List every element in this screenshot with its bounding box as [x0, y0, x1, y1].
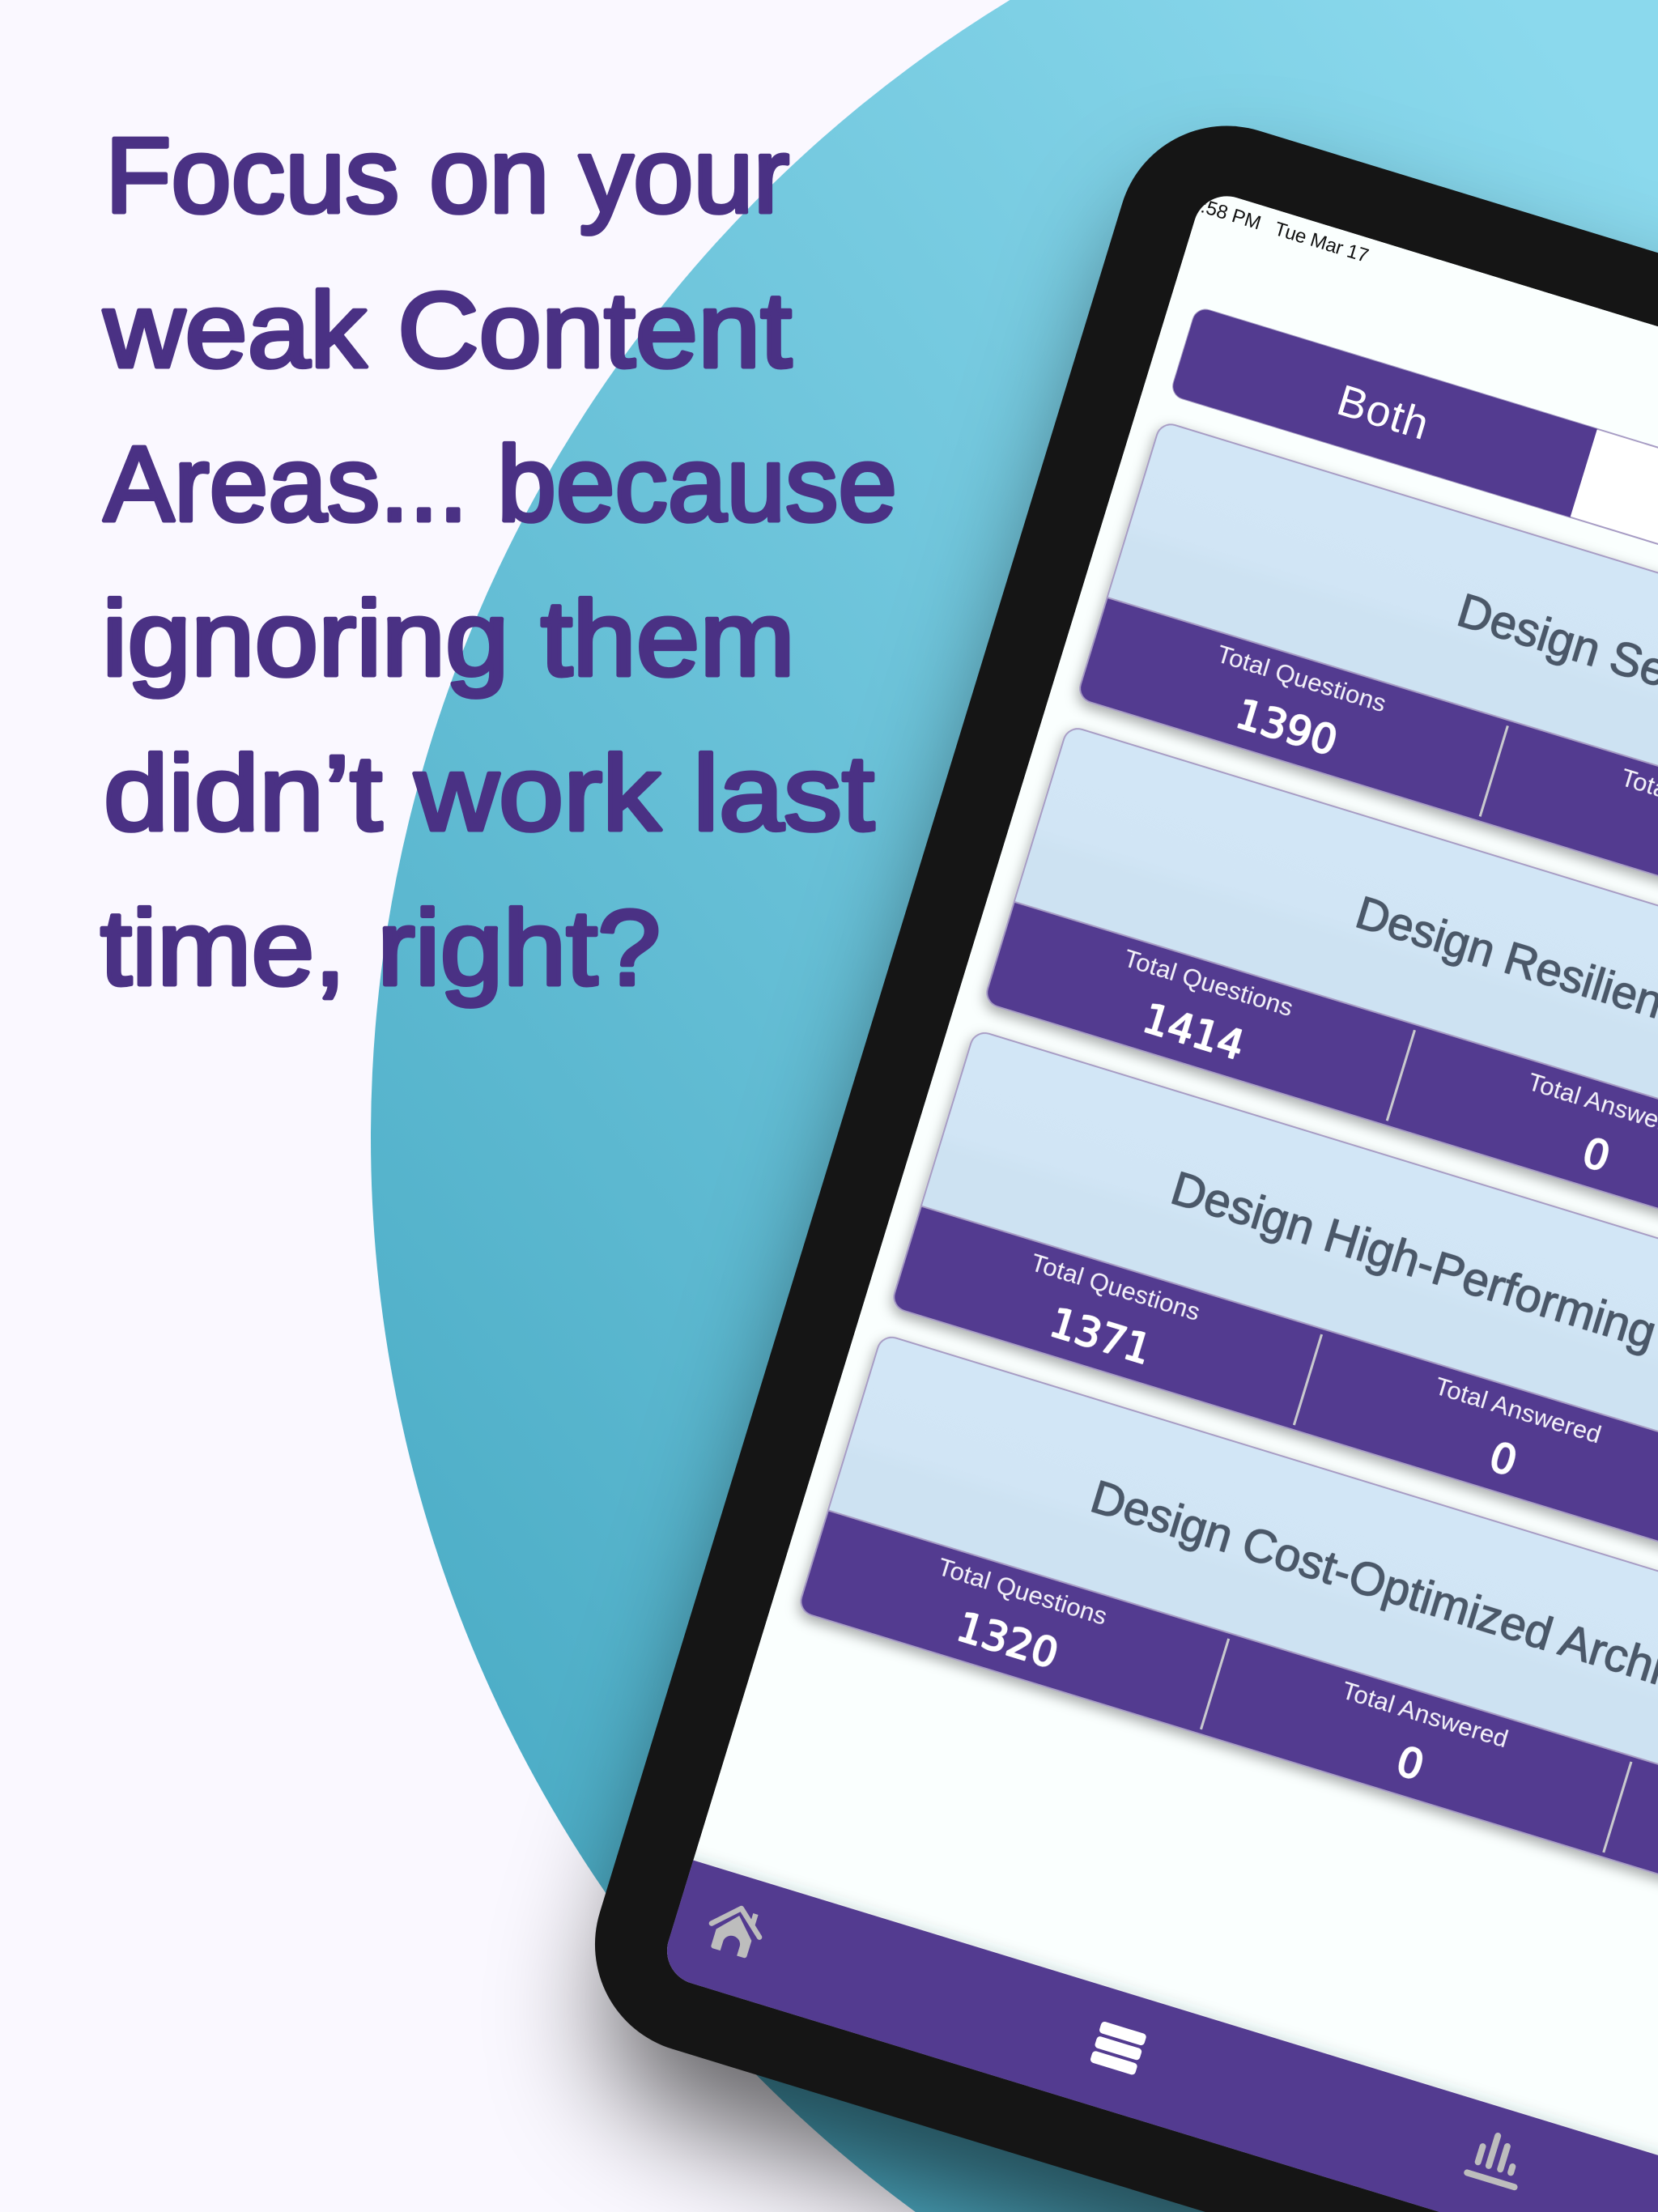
card: Design Resilient Architectures: 1414: [1137, 994, 1250, 1070]
device shadow: [578, 171, 1658, 2212]
screen: [629, 181, 1658, 2212]
headline: ignoring them: [102, 579, 795, 698]
headline: [100, 116, 897, 1007]
card: Design Resilient Architectures: Total Questions: [1120, 943, 1297, 1022]
card: Design Cost-Optimized Architectures: 1320: [951, 1603, 1064, 1678]
card: Design Cost-Optimized Architectures: [797, 1334, 1658, 2004]
teal circle: [371, 0, 1658, 2212]
segment label: Both: [1332, 376, 1435, 449]
card: Design High-Performing Architectures: [891, 1030, 1658, 1699]
card: Design Resilient Architectures: [984, 725, 1658, 1396]
card: Design Cost-Optimized Architectures: Total Answered: [1338, 1676, 1511, 1753]
segmented control: [1172, 309, 1658, 545]
status bar: [1201, 201, 1370, 261]
card: Design Cost-Optimized Architectures: Total Questions: [934, 1552, 1111, 1631]
status bar: :58 PM: [1198, 195, 1264, 234]
headline: didn’t work last: [104, 734, 874, 853]
card: Design Secure Architectures: [1077, 421, 1658, 1091]
icon: home: [704, 1901, 766, 1960]
headline: Focus on your: [105, 116, 789, 235]
card: Design High-Performing Architectures: Total Answered: [1431, 1372, 1605, 1449]
headline: Areas... because: [104, 424, 897, 543]
headline: time, right?: [100, 888, 661, 1007]
tab bar: [629, 1853, 1658, 2212]
status bar: Tue Mar 17: [1272, 218, 1371, 267]
card: Design Resilient Architectures: 0: [1577, 1129, 1615, 1181]
screen background: [659, 188, 1658, 2212]
icon: bar chart: [1463, 2126, 1532, 2191]
icon: list menu: [1090, 2021, 1147, 2076]
card: Design High-Performing Architectures: 0: [1484, 1433, 1522, 1486]
headline: weak Content: [103, 270, 792, 389]
card: Design Cost-Optimized Architectures: 0: [1391, 1738, 1430, 1790]
card: Design Secure Architectures: Total Questions: [1214, 640, 1390, 717]
card: Design Secure Architectures: 1390: [1231, 690, 1343, 765]
tablet device: [568, 99, 1658, 2212]
card: Design High-Performing Architectures: Total Questions: [1027, 1248, 1204, 1326]
device body: [568, 99, 1658, 2212]
card: Design High-Performing Architectures: 1371: [1044, 1299, 1157, 1374]
